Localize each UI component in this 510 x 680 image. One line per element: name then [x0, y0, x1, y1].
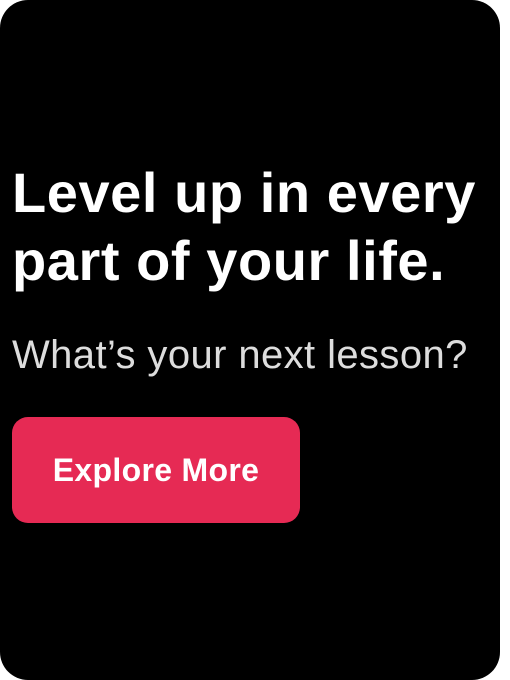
button: Explore More [12, 417, 300, 523]
title [12, 161, 476, 292]
title: part of your life. [12, 229, 445, 292]
subtitle: What’s your next lesson? [12, 333, 468, 377]
button: Explore More: Explore More [53, 452, 259, 488]
title: Level up in every [12, 161, 476, 224]
